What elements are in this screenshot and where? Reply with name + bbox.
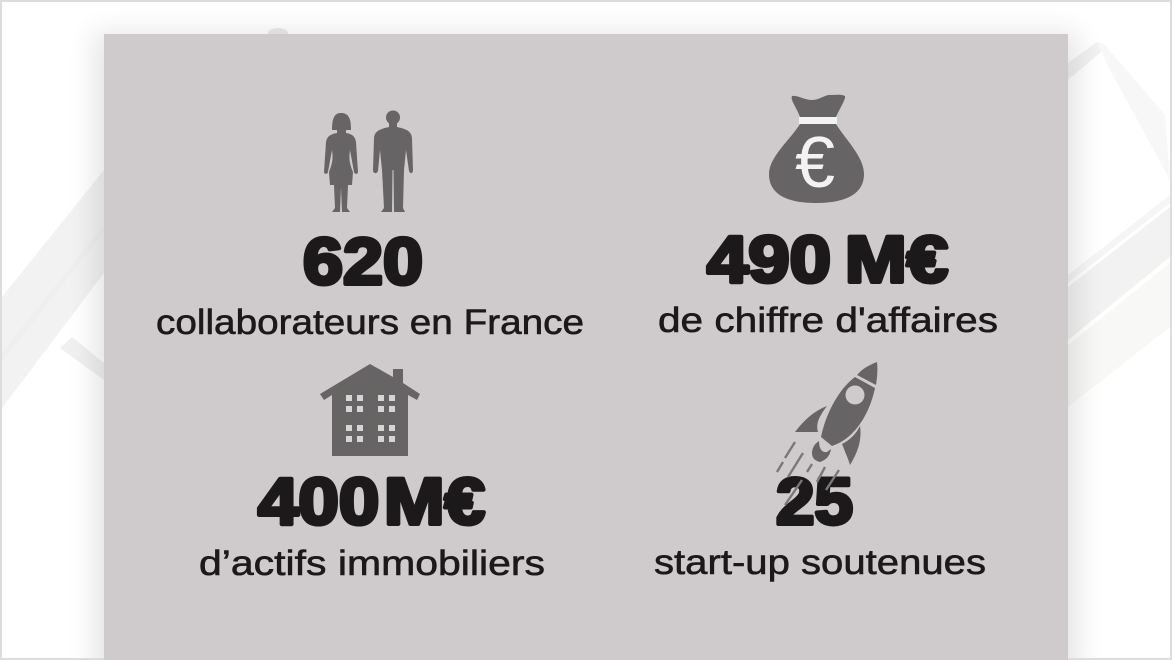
stat: 490 M€: 490 M€ <box>707 222 948 296</box>
icon: money bag <box>769 95 864 203</box>
label: start-up: start-up soutenues <box>654 543 986 582</box>
stat: 25: 25 <box>776 464 853 538</box>
label: chiffre d'affaires: de chiffre d'affaires <box>658 301 998 340</box>
panel: key figures <box>104 34 1068 660</box>
icon: apartment house <box>320 364 420 456</box>
label: actifs immobiliers: d’actifs immobiliers <box>199 544 545 583</box>
icon: woman and man <box>324 110 413 212</box>
stat: 620: 620 <box>303 224 423 298</box>
icon: rocket <box>777 362 877 505</box>
icon: money bag: € <box>795 123 835 203</box>
label: collaborateurs: collaborateurs en France <box>156 303 584 342</box>
stat: 400 M€: 400 M€ <box>258 464 485 538</box>
